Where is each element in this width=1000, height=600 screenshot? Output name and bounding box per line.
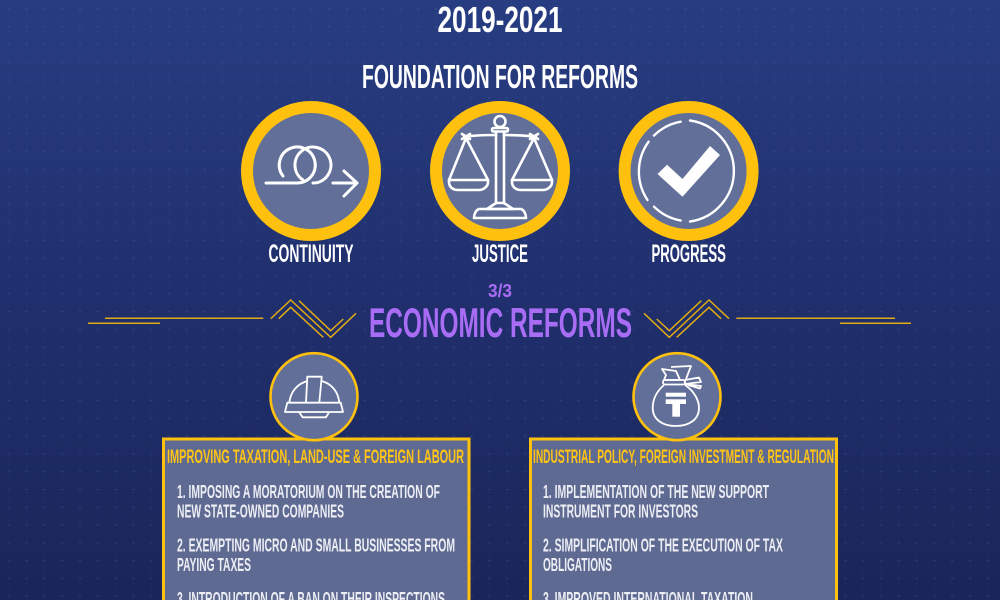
label: justice: JUSTICE [472,240,528,268]
list text [177,482,455,600]
icon: continuity [247,107,375,235]
list text: INSTRUMENT FOR INVESTORS [543,502,698,522]
icon: money bag [634,353,720,440]
heading: economic reforms: ECONOMIC REFORMS [369,299,632,346]
label: continuity: CONTINUITY [268,240,354,268]
panel: industrial policy [530,439,836,600]
list text: NEW STATE-OWNED COMPANIES [177,502,344,522]
list text: 1. IMPLEMENTATION OF THE NEW SUPPORT [543,482,769,502]
heading: foundation for reforms: FOUNDATION FOR REFORMS [362,59,638,96]
list text: PAYING TAXES [177,555,251,575]
panel: improving taxation [164,439,469,600]
list text: 2. SIMPLIFICATION OF THE EXECUTION OF TAX [543,536,783,556]
ornament: right lines [644,300,911,337]
list text: 2. EXEMPTING MICRO AND SMALL BUSINESSES FROM [177,536,455,556]
icon: hard hat [270,353,358,440]
panel heading: IMPROVING TAXATION, LAND-USE & FOREIGN LABOUR [167,446,464,468]
list text: OBLIGATIONS [543,555,612,575]
label: progress: PROGRESS [651,240,726,268]
list text [543,482,783,600]
section counter: 3/3 [488,281,512,301]
icon: progress check [625,107,753,235]
ornament: left lines [88,300,356,337]
title: years: 2019-2021 [438,0,562,40]
icon: justice scales [436,107,564,235]
list text: 1. IMPOSING A MORATORIUM ON THE CREATION OF [177,482,440,502]
